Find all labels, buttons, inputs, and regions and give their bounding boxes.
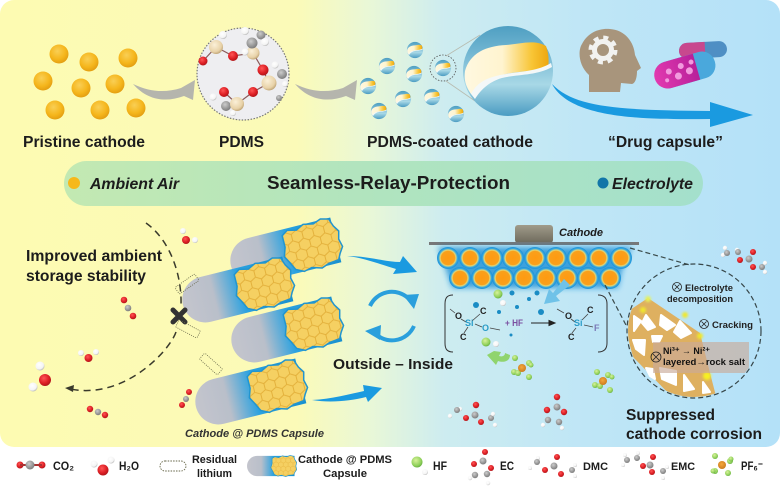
capsule 2 [177,254,298,328]
rock salt region [653,342,749,373]
heading: improved ambient storage stability: Improved ambient [26,248,163,265]
reaction arrow [531,320,555,326]
cathode current collector block [515,225,553,243]
legend: CO2 icon [16,460,46,470]
banner title: Seamless-Relay-Protection [267,172,510,193]
H2O molecule [78,349,99,362]
cathode plate [429,242,639,245]
Ni conversion note: Ni³⁺ → Ni²⁺ [663,346,710,357]
legend: DMC icon [528,454,577,478]
product structure: Si [574,318,583,328]
legend [16,449,763,485]
reactant structure: C [480,306,487,316]
reactant structure: O [482,323,489,333]
reactant structure: C [460,332,467,342]
label: PDMS: PDMS [219,134,264,151]
electrolyte decomposition note [667,282,733,305]
cathode label: Cathode [559,227,603,239]
electrolyte dot [598,178,608,188]
reactant structure: Si [465,318,474,328]
dashed zoom lines to lens [605,248,690,327]
legend: HF label: HF [433,461,447,473]
+ HF label: + HF [505,318,523,328]
legend: EC label: EC [500,461,514,473]
capsule 1 [225,215,346,289]
HF molecule [482,338,499,347]
relay protection banner [64,161,703,206]
legend: capsule icon [247,455,297,477]
blue arrow lower [312,385,382,402]
legend: HF icon [412,456,428,475]
head with gear icon [580,29,641,92]
label: Drug capsule: “Drug capsule” [608,134,723,151]
PF6 molecule [511,355,534,380]
reaction brackets [445,295,607,352]
legend: EMC icon [621,451,669,480]
ambient air dot [68,177,80,189]
EC molecule [541,394,567,430]
electrolyte dots [473,290,544,336]
label: PDMS-coated cathode: PDMS-coated cathode [367,134,533,151]
Ni conversion note: layered→rock salt [663,357,746,368]
blue arrow to cathode [347,256,417,274]
legend: H2O icon [90,456,114,476]
arrow: pristine to PDMS [133,80,195,100]
arrow: PDMS to coated cathode [295,80,357,100]
legend: EMC label: EMC [671,461,695,473]
legend: H2O label: H₂O [119,459,139,473]
product structure: C [587,305,594,315]
blocked X mark [173,310,185,322]
heading: suppressed cathode corrosion: Suppressed [626,407,715,424]
electrolyte label: Electrolyte [612,176,693,193]
H2O molecule large [28,362,51,392]
DMC molecule [448,402,497,427]
legend: capsule label: Capsule [323,468,367,480]
reactant structure [450,306,500,342]
legend: CO2 label: CO₂ [53,459,74,473]
capsule 3 [226,294,347,368]
CO2 molecule [179,389,192,408]
capsule caption: Cathode @ PDMS Capsule [185,428,324,440]
corroded particle [625,296,716,398]
heading: suppressed cathode corrosion: cathode corrosion [626,426,762,443]
heading: improved ambient storage stability: storage stability [26,268,146,285]
electrolyte decomposition note: decomposition [667,294,733,305]
legend: PF6 icon [710,453,734,476]
electrolyte decomposition note: Electrolyte [685,283,733,294]
light blue arrow [544,279,570,304]
EMC molecule [721,246,767,274]
zoom lines to enlarged particle [446,35,480,101]
pristine cathode particles [34,44,146,120]
capsule 4 [190,356,311,430]
magnified particle lens [625,264,761,398]
cycle arrows [365,292,419,340]
HF molecule [494,290,506,306]
product structure [557,305,600,342]
PDMS molecule circle [197,27,289,120]
CO2 molecule [121,297,136,319]
reactant structure: O [455,311,462,321]
coated particle layer [437,247,632,289]
product structure: O [565,311,572,321]
Ni conversion note [651,346,746,368]
drug capsule icon [651,41,727,92]
blue arrow [552,84,753,127]
legend: PF6 label: PF₆⁻ [741,459,763,473]
product structure: F [594,323,600,333]
small PDMS-coated particles [360,42,464,122]
dashed deflection arc [65,223,181,392]
legend: residual lithium label: Residual [192,454,237,466]
legend: capsule label: Cathode @ PDMS [298,454,393,466]
ambient air label: Ambient Air [89,176,180,193]
residual lithium shapes [175,274,223,375]
CO2 molecule [87,406,108,418]
label: Pristine cathode: Pristine cathode [23,134,145,151]
green curved arrow [487,351,510,365]
legend: EC icon [468,449,494,485]
PF6 molecule [592,369,614,393]
cracking note: Cracking [712,320,753,331]
legend: DMC label: DMC [583,461,608,473]
enlarged coated particle [463,26,553,116]
H2O molecule [180,228,198,244]
label: Outside – Inside: Outside – Inside [333,356,453,373]
legend: residual lithium label: lithium [197,468,232,480]
product structure: C [568,332,575,342]
legend: residual lithium icon [160,461,186,471]
